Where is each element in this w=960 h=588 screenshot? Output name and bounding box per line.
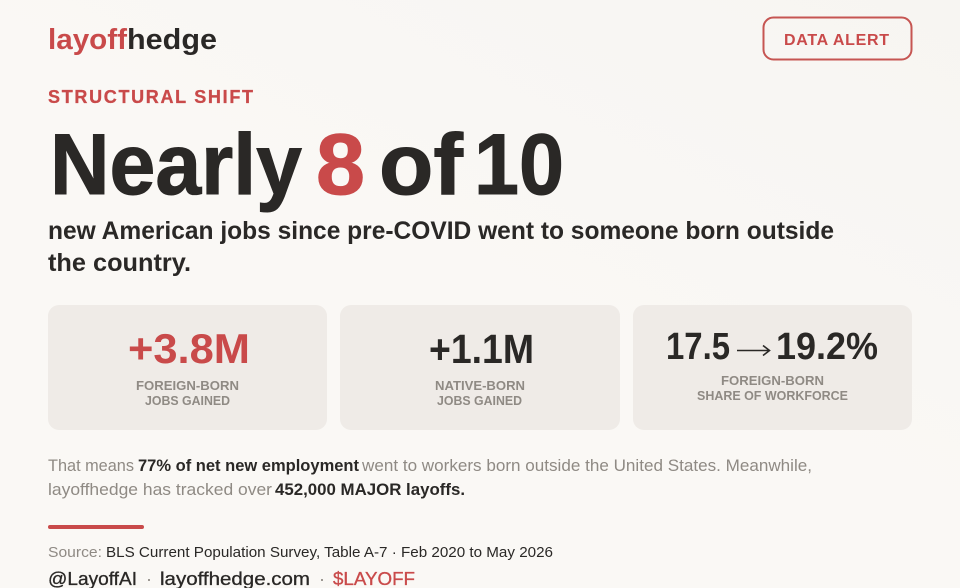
stat label: FOREIGN-BORN [136,378,239,393]
panel: foreign-born share of workforce [633,305,912,430]
title [50,117,564,213]
stat: 17.5 to 19.2% [666,326,878,368]
subtitle: new American jobs since pre-COVID went to someone born outside [48,217,834,245]
title: of [379,117,463,213]
title: 8 [316,117,365,213]
badge: data alert: DATA ALERT [784,32,889,49]
accent divider [48,525,144,529]
logo: layoffhedge: layoff [48,24,127,56]
body paragraph: went to workers born outside the United States. Meanwhile, [361,457,812,475]
stat label [697,373,848,403]
panel: foreign-born jobs gained [48,305,327,430]
source line: BLS Current Population Survey, Table A-7 · Feb 2020 to May 2026 [106,545,553,561]
stat: +3.8M: +3.8M [128,325,250,372]
stat label [136,378,239,408]
title: Nearly [50,117,302,213]
subtitle [48,217,834,277]
badge: data alert [764,18,912,60]
logo: layoffhedge [48,24,217,56]
stat label: JOBS GAINED [437,393,522,408]
body paragraph [48,457,812,499]
panel: native-born jobs gained [340,305,620,430]
stat label: JOBS GAINED [145,393,230,408]
footer links [48,569,415,588]
stat: +1.1M: +1.1M [429,326,534,372]
stat: 17.5 to 19.2%: 19.2% [776,326,878,368]
eyebrow: structural shift: STRUCTURAL SHIFT [48,87,253,107]
body paragraph: 452,000 MAJOR layoffs. [275,481,465,499]
arrow [737,346,770,356]
body paragraph: That means [48,457,134,475]
body paragraph: layoffhedge has tracked over [48,481,273,499]
stat: 17.5 to 19.2%: 17.5 [666,326,730,368]
stat label: SHARE OF WORKFORCE [697,388,848,403]
source line: Source: [48,545,102,561]
body paragraph: 77% of net new employment [138,457,359,475]
subtitle: the country. [48,249,191,277]
logo: layoffhedge: hedge [127,24,217,56]
title: 10 [474,117,564,213]
stat label: FOREIGN-BORN [721,373,824,388]
stat label [435,378,525,408]
stat label: NATIVE-BORN [435,378,525,393]
